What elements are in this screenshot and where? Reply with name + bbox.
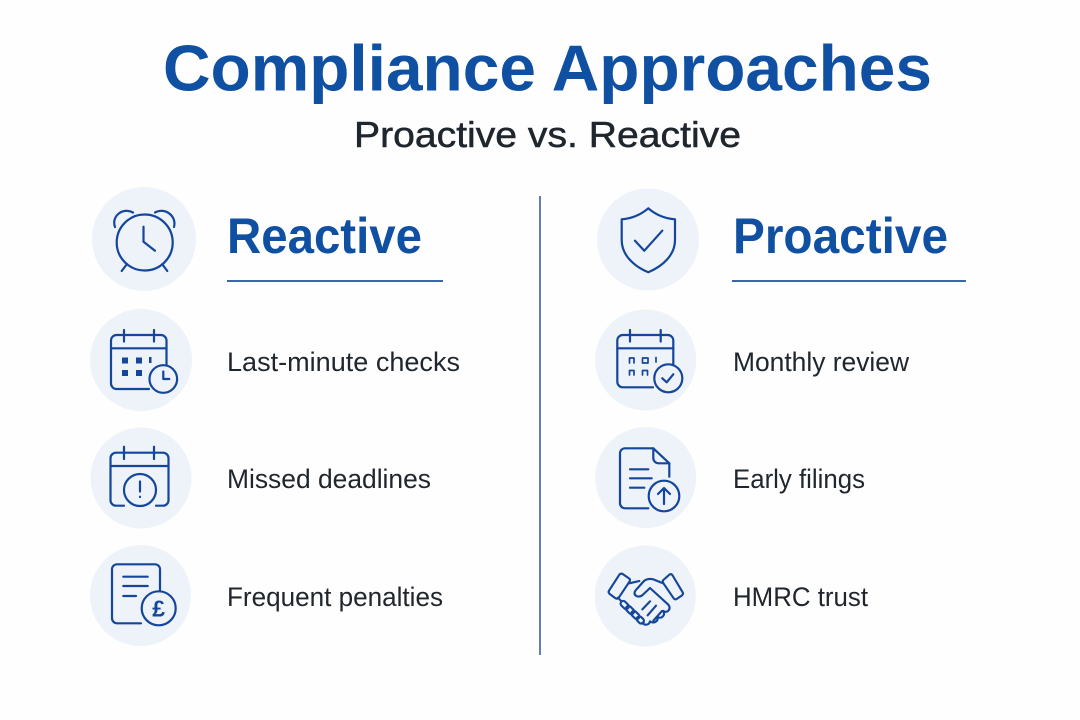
- panel: proactive: [595, 188, 966, 646]
- item: early filings: Early filings: [733, 464, 865, 494]
- item: monthly review: Monthly review: [733, 347, 909, 377]
- item: frequent penalties: Frequent penalties: [227, 582, 443, 612]
- icon: calendar with check: [595, 310, 696, 410]
- icon: document with pound: [90, 545, 191, 646]
- heading underline: [732, 280, 966, 282]
- item: hmrc trust: HMRC trust: [733, 582, 868, 612]
- center divider: [539, 196, 541, 655]
- heading: proactive: Proactive: [733, 208, 948, 264]
- item: missed deadlines: Missed deadlines: [227, 464, 431, 494]
- icon: calendar with clock: [90, 309, 192, 411]
- heading: reactive: Reactive: [227, 208, 422, 264]
- icon: shield with check: [597, 188, 699, 290]
- subtitle: Proactive vs. Reactive: [354, 114, 741, 155]
- item: last-minute checks: Last-minute checks: [227, 347, 460, 377]
- icon: document with pound: £: [152, 596, 165, 622]
- icon: alarm clock: [92, 187, 196, 291]
- icon: handshake: [595, 546, 696, 646]
- heading underline: [227, 280, 443, 282]
- title: Compliance Approaches: [163, 32, 932, 104]
- panel: reactive: [90, 187, 460, 646]
- icon: document with upload arrow: [595, 427, 696, 528]
- icon: calendar with alert: [90, 428, 192, 528]
